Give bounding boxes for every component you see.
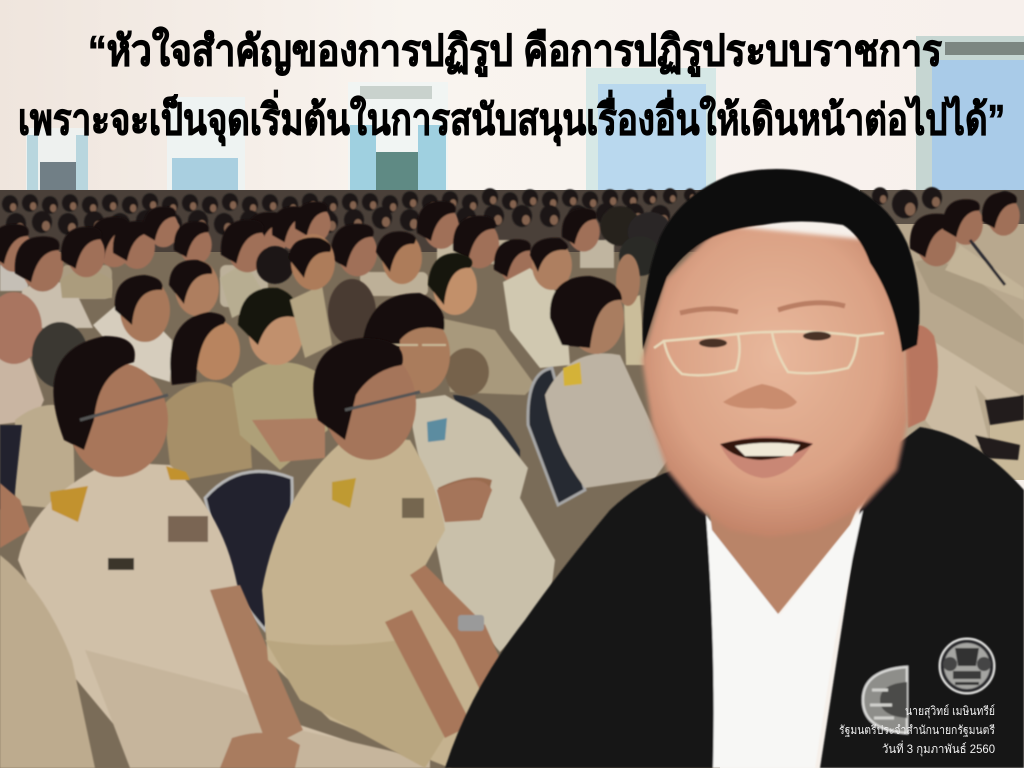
window 5 [916, 36, 1024, 208]
person: man 1 foreground left [0, 336, 430, 768]
attribution text: วันที่ 3 กุมภาพันธ์ 2560 [882, 740, 995, 757]
attribution text: รัฐมนตรีประจำสำนักนายกรัฐมนตรี [839, 723, 995, 737]
eyes and brows [680, 309, 738, 313]
crowd: officials on the right [910, 192, 1024, 460]
nose and mouth [723, 384, 797, 409]
person: mid man second [169, 260, 219, 316]
person: man behind woman [288, 231, 422, 358]
person: man white-beige shirt left [15, 236, 93, 328]
person: main portrait, minister [445, 169, 1024, 768]
person: woman facing camera [428, 253, 535, 395]
ears [905, 325, 938, 428]
jacket emblem [863, 667, 907, 733]
chair back behind official [528, 368, 585, 505]
window 4 [586, 68, 716, 193]
shirt [706, 510, 863, 768]
person: man with glasses mid [362, 293, 555, 652]
person: man khaki mid [220, 220, 294, 318]
person: man 2 foreground centre [262, 338, 505, 768]
background: crowd base [0, 190, 1024, 768]
person: woman centre [232, 288, 328, 470]
person: man in light uniform [545, 276, 668, 488]
jacket [445, 470, 745, 768]
person: man dark hair behind [15, 322, 88, 510]
background: hall wall and windows [0, 0, 1024, 208]
person: man white shirt [93, 275, 172, 382]
person: bald man back right [503, 238, 645, 368]
window 1 [26, 128, 88, 198]
hair [643, 169, 919, 352]
crowd: back rows of officials [0, 201, 672, 307]
crowd: middle row seated officials [0, 220, 668, 652]
window 3 [348, 82, 448, 197]
face [642, 225, 908, 537]
person: woman khaki left back [60, 227, 112, 298]
glasses [654, 332, 884, 375]
window 2 [167, 97, 245, 198]
headline quote [18, 26, 1005, 146]
icon: government seal [940, 638, 994, 694]
chairs: navy seats with silver frames [0, 425, 292, 630]
person: bald man far left [0, 292, 44, 425]
attribution text [839, 704, 995, 757]
attribution text: นายสุวิทย์ เมษินทรีย์ [905, 704, 995, 719]
crowd: distant rows of heads [2, 187, 1015, 235]
neck [708, 490, 865, 614]
navy chair middle [453, 395, 520, 470]
person: woman with dark hair [163, 312, 252, 482]
